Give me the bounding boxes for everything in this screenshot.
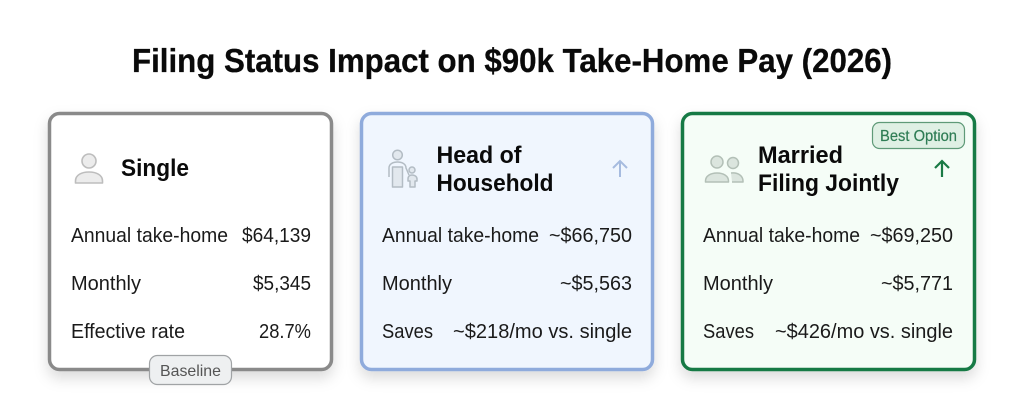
row: monthly: ~$5,771 [881, 272, 953, 295]
row: annual take-home: Annual take-home [71, 224, 228, 247]
row: monthly: $5,345 [253, 272, 311, 295]
row: effective rate: Effective rate [71, 320, 185, 343]
row: annual take-home [703, 224, 953, 247]
row: saves: Saves [703, 320, 754, 343]
row: saves: ~$426/mo vs. single [775, 320, 953, 343]
badge: baseline [150, 356, 232, 384]
row: annual take-home [382, 224, 632, 247]
heading: head of household: Household [436, 170, 554, 197]
row: monthly: ~$5,563 [560, 272, 632, 295]
row: annual take-home: ~$66,750 [549, 224, 632, 247]
badge: best option [872, 122, 964, 148]
row: monthly [703, 272, 953, 295]
heading: single: Single [121, 155, 189, 182]
row: annual take-home: $64,139 [242, 224, 311, 247]
row: annual take-home: ~$69,250 [870, 224, 953, 247]
row: monthly: Monthly [703, 272, 774, 295]
row: annual take-home: Annual take-home [703, 224, 860, 247]
heading: head of household: Head of [436, 142, 522, 169]
title: Filing Status Impact on $90k Take-Home Pay (2026) [132, 43, 892, 80]
row: monthly [71, 272, 311, 295]
badge: baseline: Baseline [160, 363, 221, 380]
badge: best option: Best Option [880, 128, 957, 145]
heading: married filing jointly: Married [758, 142, 843, 169]
row: effective rate: 28.7% [259, 320, 311, 343]
row: saves: Saves [382, 320, 433, 343]
icon: up arrow [613, 161, 627, 177]
heading: head of household [436, 142, 554, 197]
icon: two people [706, 156, 743, 182]
panel: single [50, 114, 332, 384]
row: annual take-home [71, 224, 311, 247]
row: monthly: Monthly [382, 272, 453, 295]
panel: married filing jointly [682, 114, 974, 370]
icon: parent and child [389, 150, 417, 187]
row: saves [703, 320, 953, 343]
row: annual take-home: Annual take-home [382, 224, 539, 247]
row: saves: ~$218/mo vs. single [453, 320, 632, 343]
row: effective rate [71, 320, 311, 343]
heading: married filing jointly [758, 142, 899, 197]
row: monthly [382, 272, 632, 295]
icon: up arrow [935, 161, 949, 177]
row: monthly: Monthly [71, 272, 142, 295]
heading: married filing jointly: Filing Jointly [758, 170, 899, 197]
icon: person [76, 154, 102, 183]
panel: head of household [362, 114, 652, 370]
